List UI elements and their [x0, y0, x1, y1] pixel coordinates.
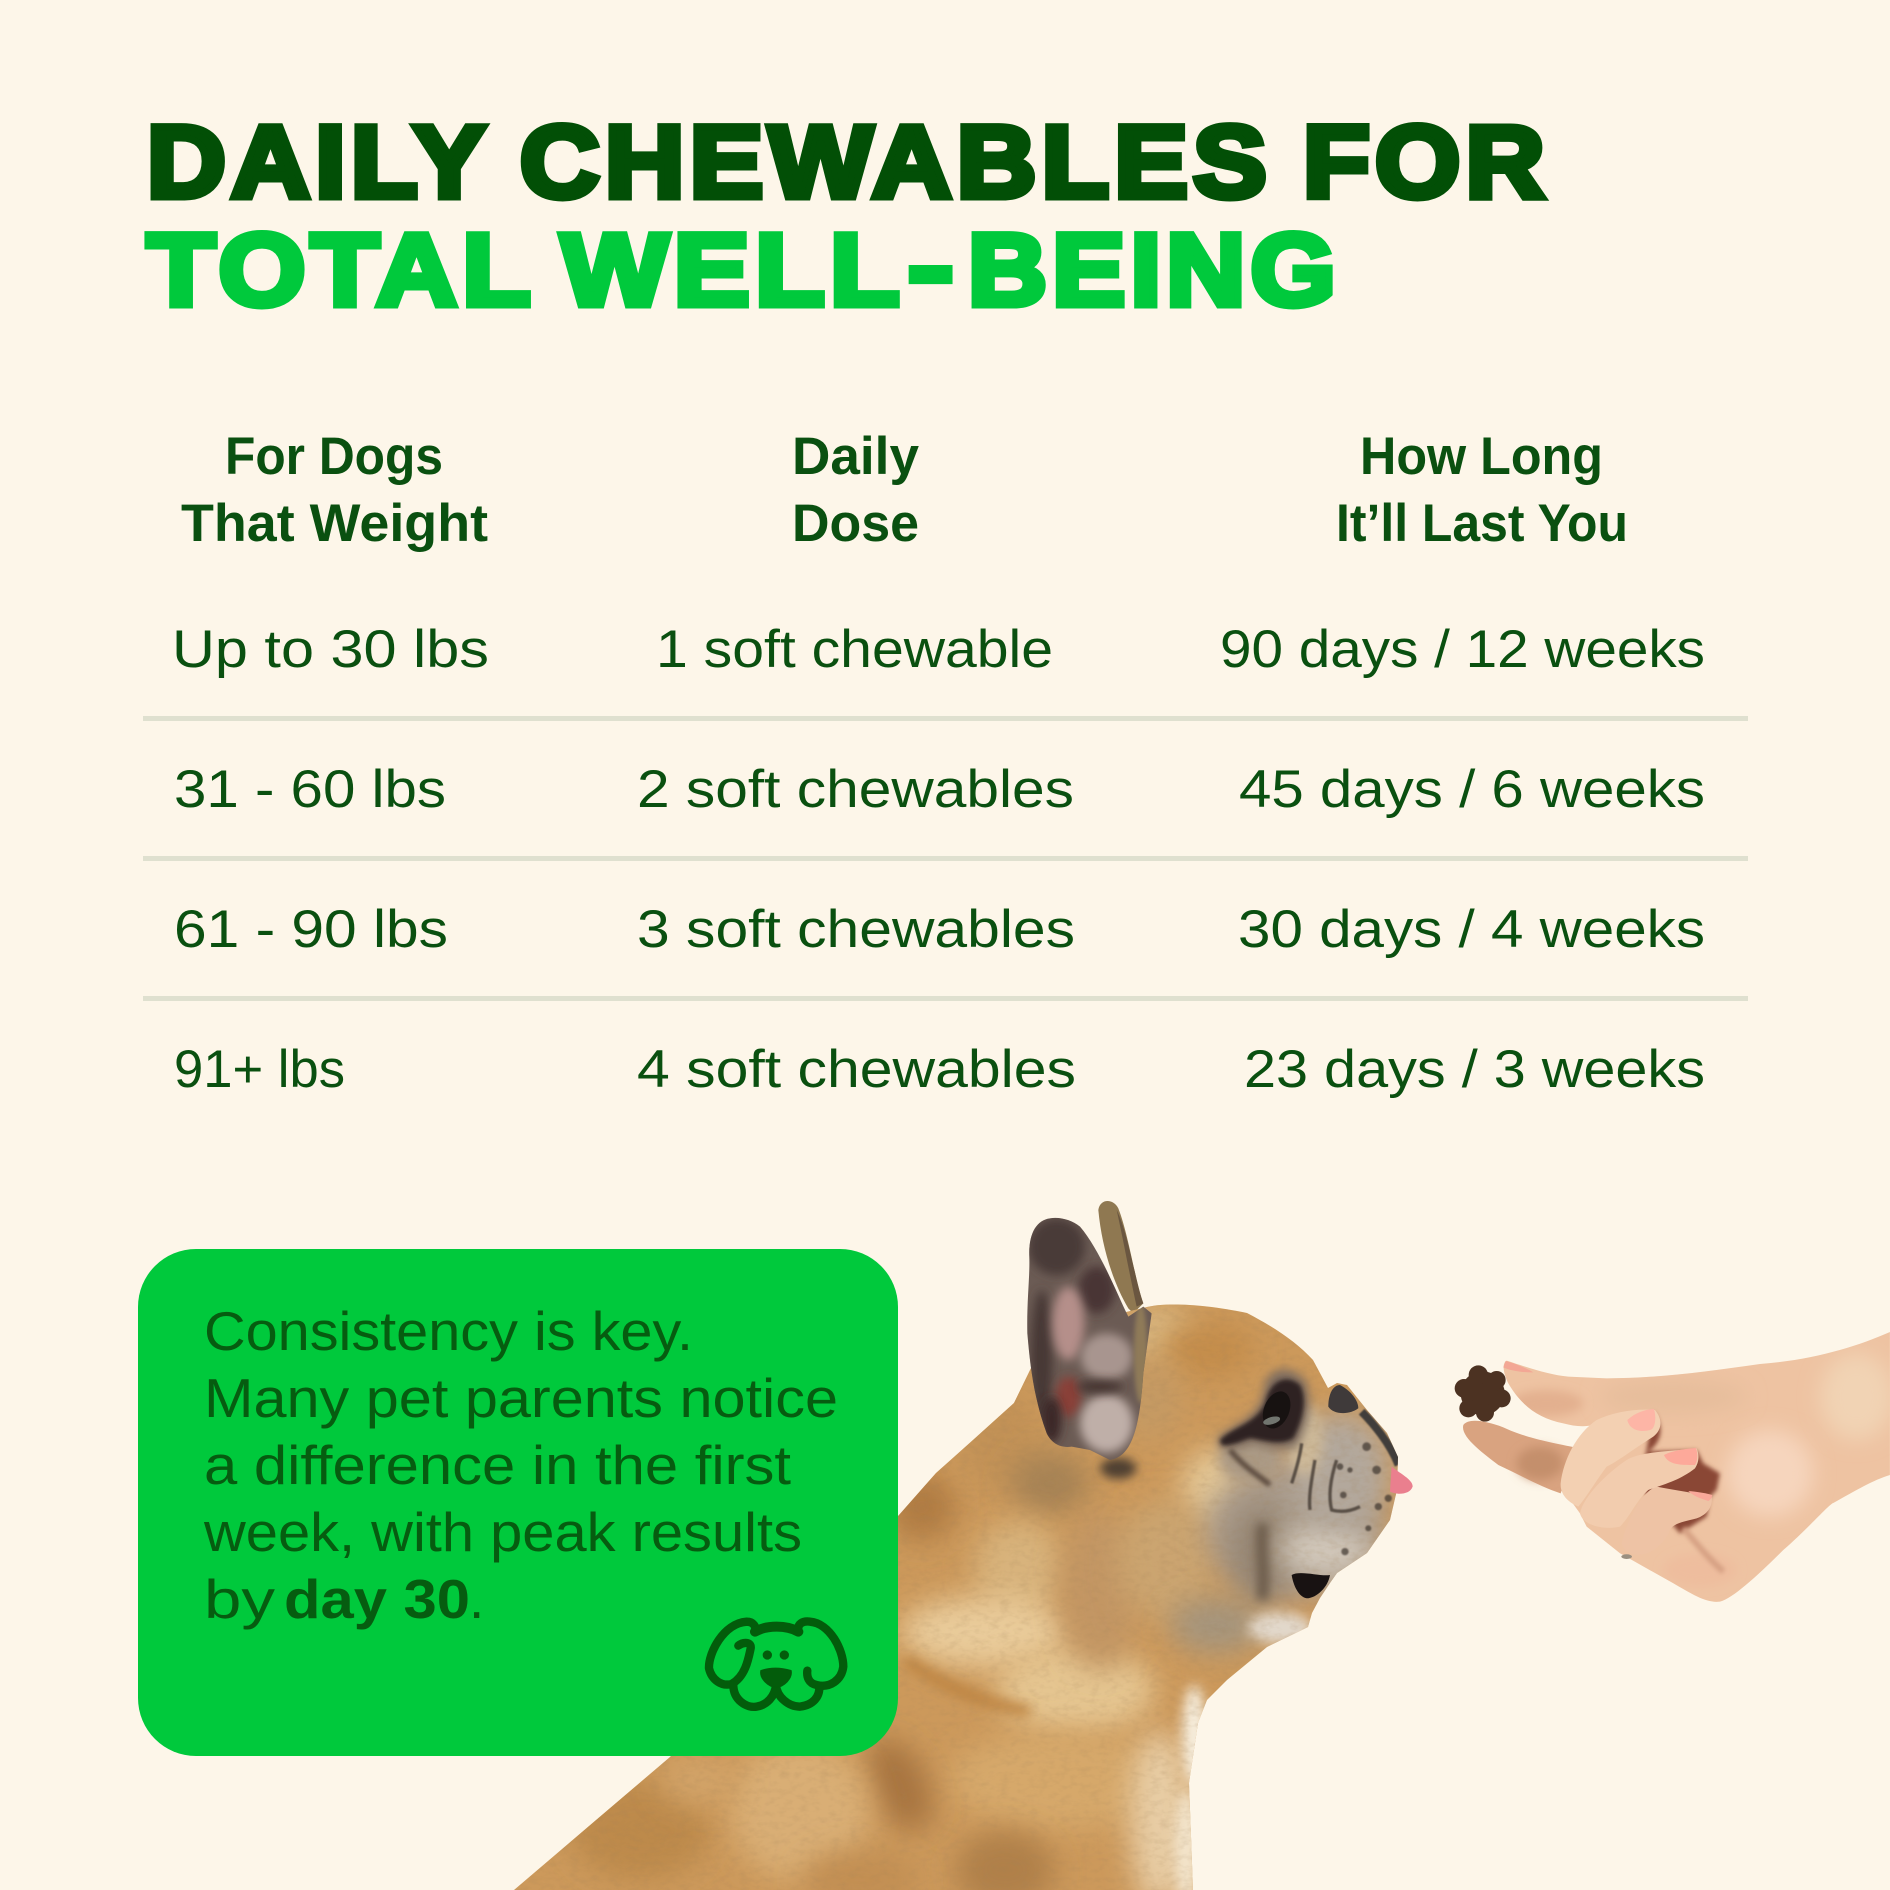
callout text: . — [469, 1568, 484, 1630]
eye patch — [1217, 1369, 1309, 1449]
row: 91+ lbs: 4 soft chewables — [637, 1040, 1076, 1099]
row: 91+ lbs: 91+ lbs — [174, 1040, 345, 1099]
title line two — [147, 209, 1341, 327]
muzzle wrinkles — [1292, 1443, 1360, 1511]
tongue — [1390, 1467, 1413, 1494]
muzzle and jaw fur — [1205, 1462, 1385, 1598]
callout text: day 30 — [284, 1568, 470, 1630]
callout text: Consistency is key. — [204, 1300, 693, 1362]
column heading: daily dose — [792, 427, 920, 553]
shadow below ear — [1100, 1458, 1137, 1479]
title line two: BEING — [968, 213, 1341, 327]
column heading: weight — [181, 427, 488, 553]
face details — [1100, 1369, 1399, 1600]
title line two: - — [908, 209, 960, 323]
nose — [1328, 1385, 1358, 1413]
column heading: weight: For Dogs — [225, 427, 443, 486]
row: 61 to 90 lbs — [174, 900, 1705, 959]
nails — [1627, 1409, 1655, 1431]
callout text: Many pet parents notice — [204, 1367, 838, 1429]
forehead and cheek shading — [1125, 1305, 1195, 1365]
front ear — [1027, 1218, 1152, 1460]
callout text: week, with peak results — [203, 1501, 802, 1563]
title — [147, 105, 1550, 327]
row: up to 30 lbs: Up to 30 lbs — [172, 620, 489, 679]
curled fingers — [1622, 1487, 1712, 1555]
row: 31 to 60 lbs: 2 soft chewables — [637, 760, 1074, 819]
row: 91+ lbs: 23 days / 3 weeks — [1244, 1040, 1705, 1099]
row: up to 30 lbs: 90 days / 12 weeks — [1220, 620, 1705, 679]
callout text: by — [204, 1568, 276, 1630]
callout text — [203, 1300, 838, 1630]
ring — [1621, 1554, 1632, 1559]
column heading: how long: How Long — [1360, 427, 1603, 486]
row: up to 30 lbs: 1 soft chewable — [656, 620, 1053, 679]
title line one: DAILY — [147, 105, 491, 219]
chewable treat — [1455, 1365, 1511, 1422]
row: 61 to 90 lbs: 61 - 90 lbs — [174, 900, 448, 959]
back ear — [1098, 1201, 1143, 1313]
arm and palm — [1493, 1320, 1890, 1607]
lip mark — [1292, 1573, 1330, 1598]
column heading: how long — [1336, 427, 1628, 553]
dosage table — [143, 427, 1748, 1099]
column heading: daily dose: Dose — [792, 494, 919, 553]
row: 61 to 90 lbs: 30 days / 4 weeks — [1238, 900, 1705, 959]
photo: french bulldog in profile — [500, 1201, 1413, 1890]
index finger — [1463, 1421, 1575, 1493]
row: 31 to 60 lbs: 45 days / 6 weeks — [1239, 760, 1705, 819]
title line two: WELL — [561, 213, 905, 327]
column heading: weight: That Weight — [181, 494, 488, 553]
title line two: TOTAL — [147, 213, 536, 327]
icon: dog face — [709, 1621, 843, 1707]
row: 31 to 60 lbs — [174, 760, 1705, 819]
title line one: CHEWABLES — [520, 105, 1272, 219]
row: 31 to 60 lbs: 31 - 60 lbs — [174, 760, 446, 819]
row: 91+ lbs — [174, 1040, 1705, 1099]
row: up to 30 lbs — [172, 620, 1705, 679]
shadow between fingers — [1640, 1412, 1720, 1533]
coat shading — [888, 1473, 956, 1541]
callout text: a difference in the first — [204, 1434, 791, 1496]
callout panel — [138, 1249, 898, 1756]
column heading: how long: It’ll Last You — [1336, 494, 1628, 553]
dog body and head — [500, 1290, 1410, 1890]
fur texture — [711, 1336, 1375, 1890]
title line one: FOR — [1303, 105, 1550, 219]
muzzle speckles — [1337, 1442, 1392, 1555]
title line one — [147, 105, 1550, 219]
jaw lines — [1230, 1450, 1270, 1485]
row: 61 to 90 lbs: 3 soft chewables — [637, 900, 1075, 959]
eye — [1262, 1392, 1290, 1428]
column heading: daily dose: Daily — [792, 427, 920, 486]
photo: hand — [1463, 1320, 1890, 1607]
